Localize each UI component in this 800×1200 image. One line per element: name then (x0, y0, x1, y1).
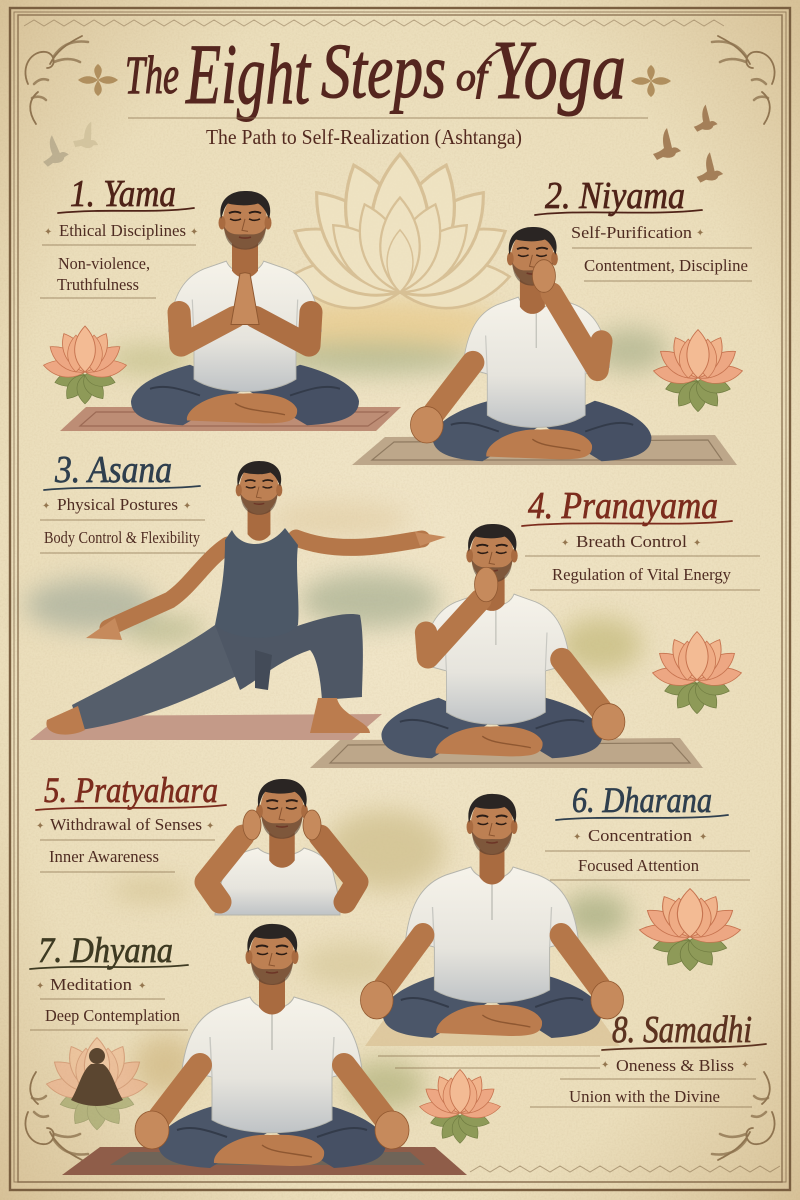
step 8 label: Samadhi: 8. Samadhi (612, 1009, 752, 1051)
step 3 label: Asana: Physical Postures (57, 495, 178, 514)
flying birds (39, 105, 723, 183)
step 2 label: Niyama: 2. Niyama (545, 175, 685, 217)
step 4 label: Pranayama: Regulation of Vital Energy (552, 565, 731, 584)
step 1 label: Yama (40, 173, 198, 298)
step 1 label: Yama: ✦ (44, 227, 52, 238)
step 4 label: Pranayama: ✦ (561, 538, 569, 549)
step 3 label: Asana: 3. Asana (54, 449, 172, 491)
step 1 label: Yama: Ethical Disciplines (59, 221, 186, 240)
step 8 label: Samadhi (530, 1009, 766, 1107)
title: Yoga (492, 24, 626, 117)
step 7 label: Dhyana: ✦ (36, 981, 44, 992)
step 7 label: Dhyana: ✦ (138, 981, 146, 992)
step 1 label: Yama: ✦ (190, 227, 198, 238)
title: The (125, 45, 179, 105)
step 5 label: Pratyahara: Withdrawal of Senses (50, 815, 202, 834)
step 2 label: Niyama (535, 175, 752, 281)
lotus decorations (42, 326, 744, 1143)
figure 4: Pranayama, breath control (310, 524, 703, 768)
title: of (456, 54, 492, 99)
step 1 label: Yama: 1. Yama (70, 173, 176, 215)
step 3 label: Asana (40, 449, 205, 553)
step 4 label: Pranayama: Breath Control (576, 532, 687, 551)
step 6 label: Dharana: Concentration (588, 826, 693, 845)
step 8 label: Samadhi: Union with the Divine (569, 1087, 720, 1106)
step 5 label: Pratyahara: ✦ (206, 821, 214, 832)
title flourishes (78, 64, 671, 118)
step 5 label: Pratyahara: Inner Awareness (49, 847, 159, 866)
step 2 label: Niyama: ✦ (696, 228, 704, 239)
figure 1: Yama, prayer pose (60, 191, 401, 431)
watercolor landscape washes (25, 299, 668, 1110)
step 3 label: Asana: Body Control & Flexibility (44, 528, 200, 547)
central line-art lotus (282, 154, 518, 315)
step 4 label: Pranayama: 4. Pranayama (528, 485, 718, 527)
step 6 label: Dharana: 6. Dharana (572, 780, 712, 820)
step 5 label: Pratyahara: ✦ (36, 821, 44, 832)
step 6 label: Dharana: Focused Attention (578, 856, 699, 875)
step 6 label: Dharana: ✦ (573, 832, 581, 843)
figure 5: Pratyahara, hands over ears (206, 779, 357, 915)
step 6 label: Dharana (545, 780, 750, 880)
step 8 label: Samadhi: Oneness & Bliss (616, 1056, 734, 1075)
step 7 label: Dhyana (30, 930, 188, 1030)
step 6 label: Dharana: ✦ (699, 832, 707, 843)
title: Steps (321, 27, 446, 114)
step 2 label: Niyama: Contentment, Discipline (584, 256, 748, 275)
step 2 label: Niyama: Self-Purification (571, 223, 693, 242)
small meditating silhouette lotus (45, 1038, 149, 1130)
figure 3: Asana, warrior pose (30, 461, 446, 740)
step 1 label: Yama: Truthfulness (57, 275, 139, 294)
step 3 label: Asana: ✦ (183, 501, 191, 512)
step 8 label: Samadhi: ✦ (741, 1060, 749, 1071)
title (125, 24, 626, 122)
title: Eight (185, 26, 311, 122)
step 5 label: Pratyahara (36, 770, 226, 872)
step 8 label: Samadhi: ✦ (601, 1060, 609, 1071)
figure 6: Dharana, seated concentration (360, 794, 624, 1068)
step 4 label: Pranayama (522, 485, 760, 590)
figure 2: Niyama, hand to nose (352, 227, 737, 465)
step 5 label: Pratyahara: 5. Pratyahara (44, 770, 218, 810)
figure 7: Dhyana, seated meditation (62, 924, 467, 1175)
step 1 label: Yama: Non-violence, (58, 254, 150, 273)
step 7 label: Dhyana: 7. Dhyana (38, 930, 173, 970)
step 4 label: Pranayama: ✦ (693, 538, 701, 549)
step 7 label: Dhyana: Meditation (50, 975, 133, 994)
step 7 label: Dhyana: Deep Contemplation (45, 1006, 180, 1025)
subtitle: The Path to Self-Realization (Ashtanga) (206, 125, 522, 149)
step 3 label: Asana: ✦ (42, 501, 50, 512)
